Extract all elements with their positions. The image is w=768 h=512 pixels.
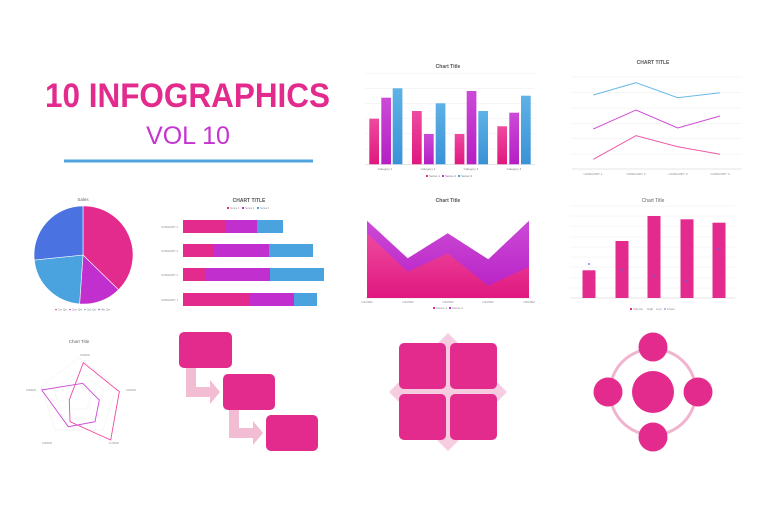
chart: stock volume: High <box>647 307 654 311</box>
chart: column chart: Category 1 <box>378 167 393 171</box>
chart: radar <box>26 339 136 445</box>
chart: pie: 3rd Qtr <box>87 308 96 312</box>
subtitle: VOL 10 <box>146 122 230 150</box>
chart: area: 1/4/2002 <box>482 300 494 304</box>
chart: column chart: Series 1 <box>429 174 440 178</box>
chart: stock volume: Close <box>667 307 675 311</box>
box 1 <box>179 332 232 368</box>
chart: line chart: CATEGORY 2 <box>626 172 646 176</box>
chart: line chart: CATEGORY 1 <box>583 172 603 176</box>
chart: line chart: CHART TITLE <box>637 60 670 66</box>
chart: pie: 2nd Qtr <box>72 308 82 312</box>
chart: column chart <box>365 64 535 178</box>
chart: stacked bar: Series 2 <box>245 207 255 210</box>
chart: area: 1/3/2002 <box>442 300 454 304</box>
box 3 <box>266 415 318 451</box>
box 2 <box>223 374 275 410</box>
chart: stacked bar: CATEGORY 4 <box>161 225 178 229</box>
chart: area: 1/5/2002 <box>523 300 535 304</box>
chart: stock volume: Volume <box>633 307 643 311</box>
chart: radar: 1/6/2002 <box>126 389 136 392</box>
chart: radar: 1/9/2002 <box>26 389 36 392</box>
chart: stock volume: Chart Title <box>642 198 665 204</box>
chart: line chart: CATEGORY 4 <box>710 172 730 176</box>
chart: pie: 1st Qtr <box>58 308 67 312</box>
chart: radar: 1/7/2002 <box>109 442 119 445</box>
chart: area <box>361 198 535 310</box>
chart: line chart: CATEGORY 3 <box>668 172 688 176</box>
title: 10 INFOGRAPHICS <box>45 77 330 115</box>
chart: pie <box>34 197 133 312</box>
chart: stock volume <box>570 198 735 311</box>
chart: radar: Chart Title <box>69 339 90 344</box>
chart: column chart: Category 4 <box>507 167 522 171</box>
chart: radar: 1/5/2002 <box>80 354 90 357</box>
chart: line chart <box>572 60 742 176</box>
chart: pie: 4th Qtr <box>101 308 110 312</box>
chart: area: Series 2 <box>452 306 463 310</box>
chart: stacked bar: CATEGORY 3 <box>161 249 178 253</box>
arrow 2 <box>229 410 263 445</box>
chart: area: Series 1 <box>436 306 447 310</box>
chart: stacked bar: CATEGORY 1 <box>161 298 178 302</box>
chart: radar: 1/8/2002 <box>42 442 52 445</box>
four-square grid <box>389 333 507 451</box>
title <box>45 77 330 150</box>
chart: column chart: Series 2 <box>445 174 456 178</box>
chart: stacked bar: Series 3 <box>260 207 270 210</box>
chart: stacked bar: CHART TITLE <box>233 198 266 204</box>
chart: area: Chart Title <box>436 198 461 204</box>
flowchart <box>179 332 318 451</box>
chart: area: 1/1/2002 <box>361 300 373 304</box>
chart: stacked bar: Series 1 <box>230 207 240 210</box>
arrow 1 <box>186 368 220 404</box>
title underline <box>64 160 313 162</box>
hub and spoke circles <box>594 332 712 452</box>
chart: pie: Sales <box>77 197 89 202</box>
chart: stacked bar: CATEGORY 2 <box>161 273 178 277</box>
chart: stock volume: Low <box>656 307 662 311</box>
chart: column chart: Series 3 <box>461 174 472 178</box>
chart: column chart: Category 2 <box>421 167 436 171</box>
chart: column chart: Chart Title <box>436 64 461 70</box>
chart: area: 1/2/2002 <box>402 300 414 304</box>
chart: stacked bar <box>161 198 324 306</box>
chart: column chart: Category 3 <box>464 167 479 171</box>
